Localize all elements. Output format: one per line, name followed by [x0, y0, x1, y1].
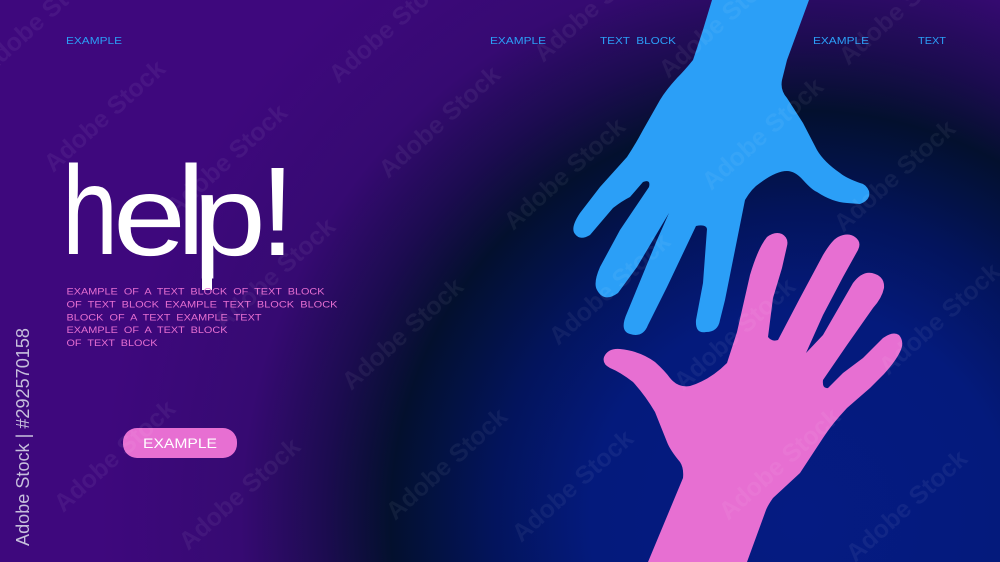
navigation bar	[66, 36, 946, 47]
body text block	[66, 286, 338, 349]
body line 5: OF TEXT BLOCK	[66, 338, 158, 349]
watermarks: Adobe Stock	[174, 432, 306, 556]
watermarks: Adobe Stock	[39, 54, 171, 178]
body line 4: EXAMPLE OF A TEXT BLOCK	[66, 325, 228, 336]
title: e	[113, 152, 186, 279]
watermarks: Adobe Stock	[499, 112, 631, 236]
watermarks: Adobe Stock	[337, 272, 469, 396]
title: !	[260, 141, 295, 282]
title	[62, 140, 295, 290]
icon: blue hand reaching down	[573, 0, 869, 335]
body line 1: EXAMPLE OF A TEXT BLOCK OF TEXT BLOCK	[66, 286, 325, 298]
watermarks: Adobe Stock	[374, 60, 506, 184]
watermarks: Adobe Stock	[161, 98, 293, 222]
nav item: example left: EXAMPLE	[66, 36, 122, 47]
title: p	[193, 152, 266, 279]
watermarks: Adobe Stock	[714, 402, 846, 526]
button: EXAMPLE	[143, 436, 217, 451]
title: l	[177, 140, 205, 281]
watermarks: Adobe Stock	[697, 72, 829, 196]
nav item: text: TEXT	[918, 36, 946, 47]
side stock id label: Adobe Stock | #292570158	[13, 328, 33, 546]
button	[123, 428, 237, 458]
icon: pink hand reaching up	[604, 233, 902, 562]
body line 3: BLOCK OF A TEXT EXAMPLE TEXT	[66, 312, 262, 324]
title: h	[62, 141, 118, 282]
watermarks: Adobe Stock	[829, 114, 961, 238]
watermarks: Adobe Stock	[381, 402, 513, 526]
watermarks: Adobe Stock	[669, 272, 801, 396]
nav item: text block: TEXT BLOCK	[600, 36, 676, 47]
watermarks: Adobe Stock	[544, 227, 676, 351]
nav item: example: EXAMPLE	[490, 36, 546, 47]
nav item: example right: EXAMPLE	[813, 36, 869, 47]
watermarks: Adobe Stock	[49, 394, 181, 518]
watermarks: Adobe Stock	[507, 424, 639, 548]
body line 2: OF TEXT BLOCK EXAMPLE TEXT BLOCK BLOCK	[66, 300, 338, 310]
watermarks: Adobe Stock	[209, 212, 341, 336]
